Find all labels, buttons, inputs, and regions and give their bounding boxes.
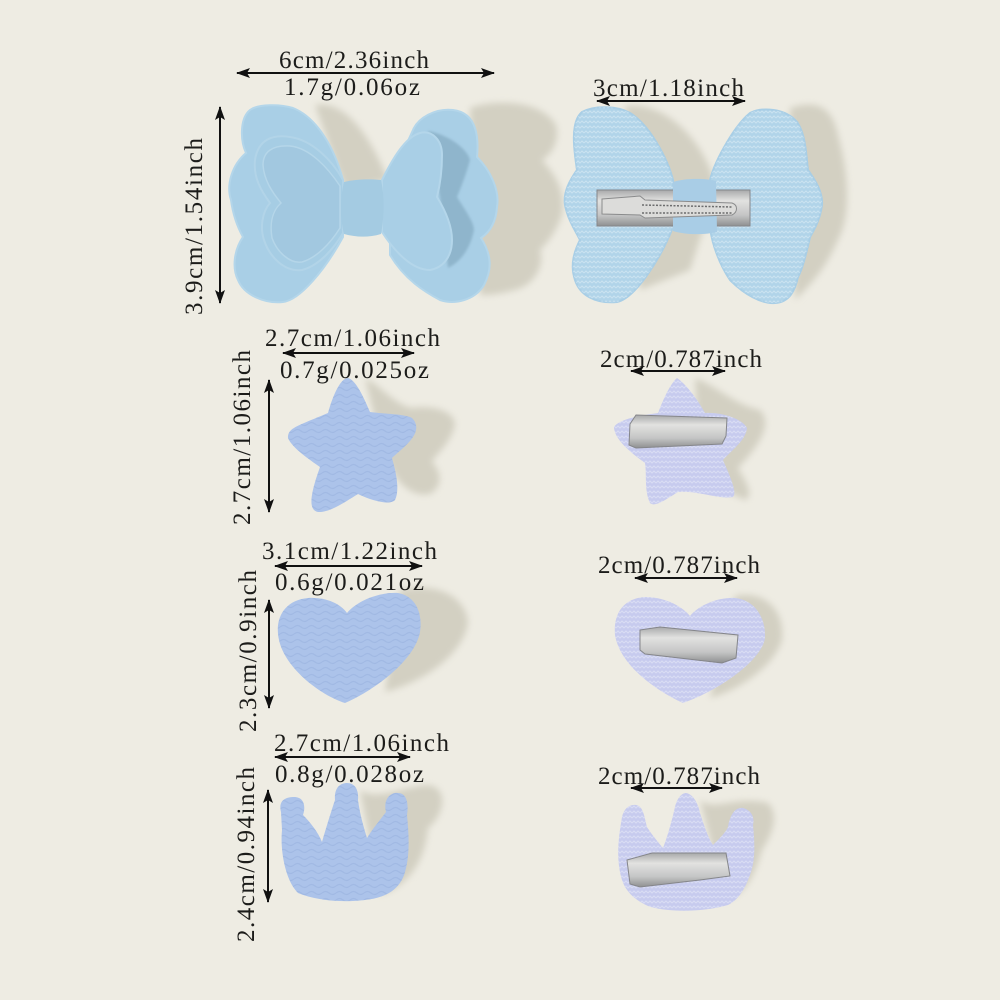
label: bow clip length: 3cm/1.18inch [593, 75, 744, 102]
arrow: heart height [268, 600, 270, 708]
label: star weight: 0.7g/0.025oz [280, 357, 429, 384]
crown, front view [280, 783, 442, 901]
star back shadow [695, 378, 765, 500]
dimensions: star width [265, 325, 440, 384]
heart back body [615, 597, 765, 703]
arrow: bow width [237, 72, 494, 74]
star shadow [365, 378, 455, 495]
arrow: crown height [267, 790, 269, 902]
label: star width: 2.7cm/1.06inch [265, 325, 440, 352]
right back wing [390, 110, 498, 302]
crown shadow [360, 785, 442, 895]
star, front view [288, 378, 455, 512]
label: star height: 2.7cm/1.06inch [229, 350, 256, 525]
left heart layer [255, 136, 343, 270]
label: heart height: 2.3cm/0.9inch [235, 570, 262, 732]
arrow: bow height [219, 107, 221, 303]
arrow: heart clip length [635, 577, 737, 579]
arrow: star width [283, 352, 414, 354]
left inner heart [263, 146, 340, 262]
heart back shadow [710, 595, 782, 698]
arrow: crown clip length [631, 787, 722, 789]
heart body [278, 593, 421, 703]
heart, back view [615, 595, 782, 703]
dimensions: large bow width [237, 47, 494, 101]
star clip [629, 415, 727, 448]
crown back shadow [700, 800, 774, 900]
label: heart weight: 0.6g/0.021oz [275, 569, 424, 596]
heart shadow [385, 588, 468, 692]
label: star clip length: 2cm/0.787inch [600, 346, 762, 373]
back bow shadow [625, 105, 847, 300]
crown body [280, 783, 409, 901]
shadow inside right wing [428, 131, 474, 268]
arrow: star clip length [631, 370, 725, 372]
label: heart clip length: 2cm/0.787inch [598, 552, 760, 579]
star back body [614, 378, 747, 504]
left satin wing [565, 107, 673, 302]
label: crown height: 2.4cm/0.94inch [233, 766, 260, 942]
label: heart width: 3.1cm/1.22inch [262, 538, 438, 565]
arrow: heart width [275, 565, 422, 567]
arrow: bow clip length [597, 100, 745, 102]
arrow: star height [268, 380, 270, 512]
clip arm [602, 196, 736, 218]
star, back view [614, 378, 765, 504]
large bow, front view [229, 103, 563, 302]
bow shadow [315, 103, 563, 295]
label: bow weight: 1.7g/0.06oz [284, 74, 420, 101]
label: crown weight: 0.8g/0.028oz [275, 761, 424, 788]
left back wing [229, 105, 343, 302]
label: bow width: 6cm/2.36inch [279, 47, 430, 74]
right heart layer [382, 132, 452, 270]
label: bow height: 3.9cm/1.54inch [181, 138, 208, 315]
dimensions: heart width [262, 538, 438, 596]
right satin wing [710, 110, 822, 303]
back knot [673, 179, 717, 234]
bow knot [341, 179, 384, 237]
crown, back view [618, 793, 774, 911]
heart clip [640, 627, 738, 663]
crown back body [618, 793, 754, 911]
label: crown width: 2.7cm/1.06inch [274, 730, 450, 757]
crown clip [627, 853, 730, 887]
label: crown clip length: 2cm/0.787inch [598, 763, 760, 790]
clip base [597, 190, 750, 226]
large bow, back view [565, 105, 847, 303]
dimensions: crown width [274, 730, 450, 788]
arrow: crown width [275, 756, 410, 758]
star body [288, 378, 416, 512]
heart, front view [278, 588, 468, 703]
